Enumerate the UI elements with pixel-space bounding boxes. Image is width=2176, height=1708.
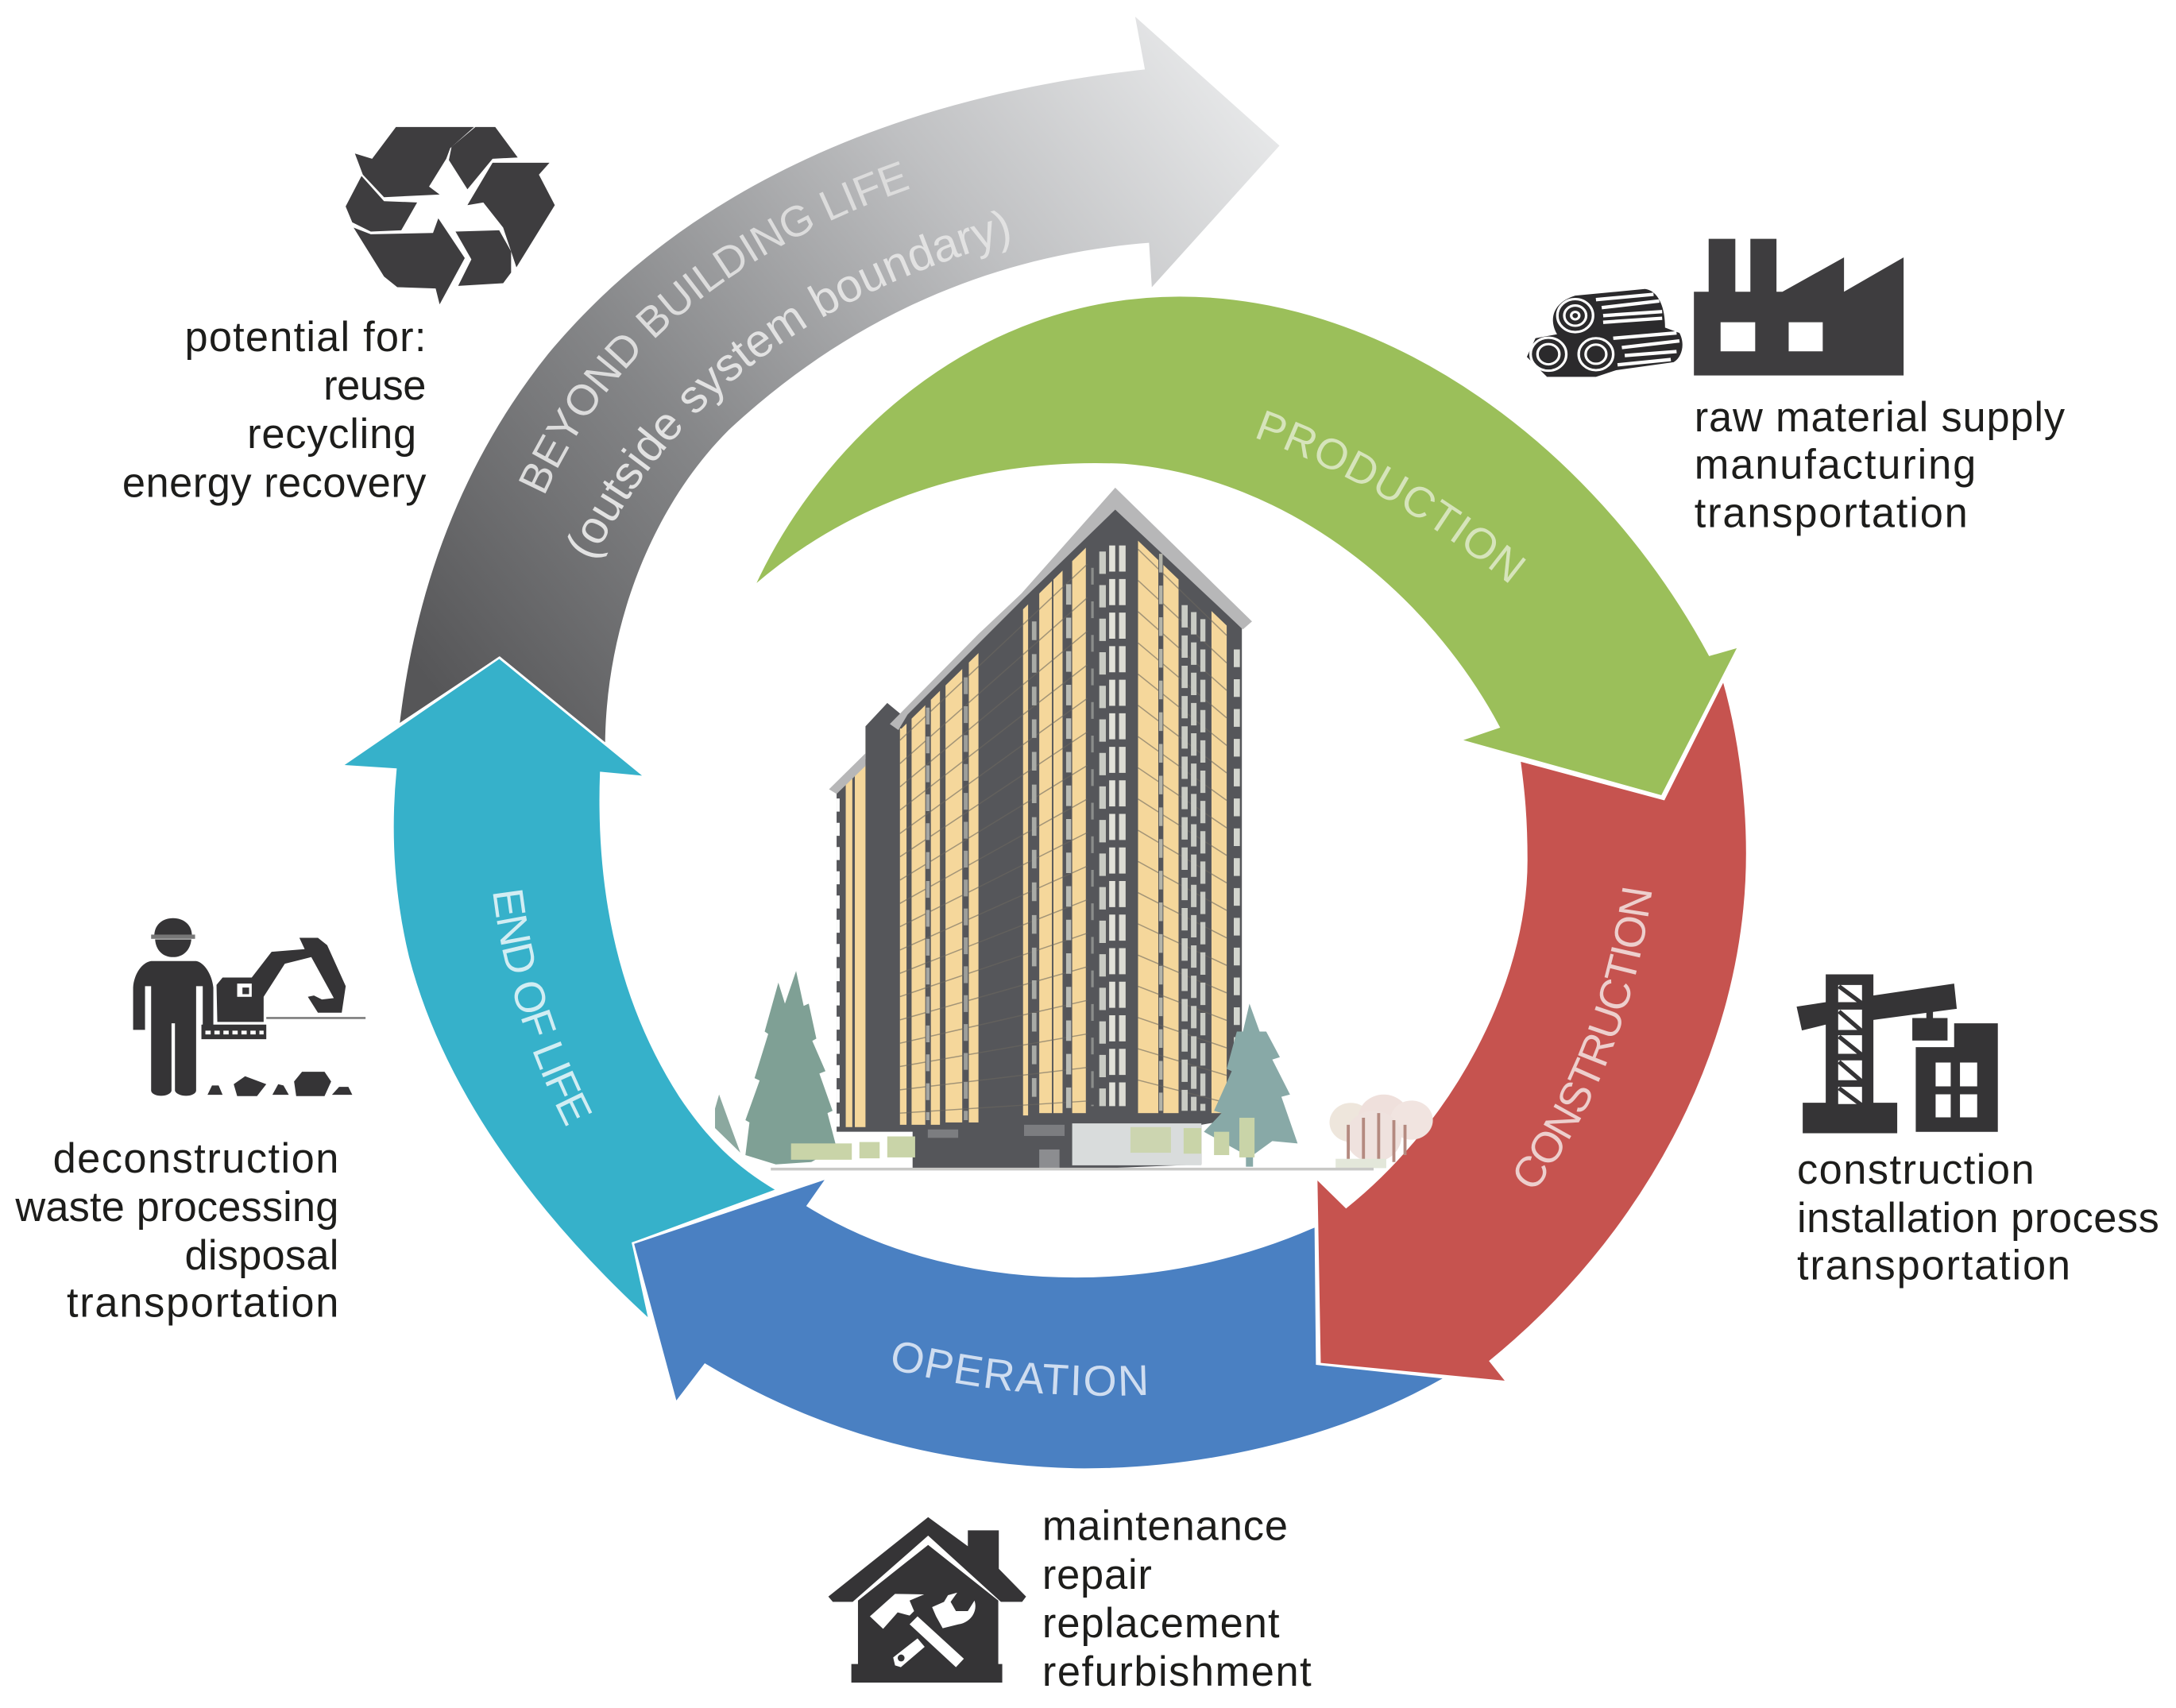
arrow: operation [632,1180,1443,1468]
text: end of life stage: transportation [67,1280,338,1326]
arrow: beyond building life [400,17,1279,742]
icon: factory [1694,239,1904,376]
text: potential for: recycling [247,412,416,458]
label: production: PRODUCTION [1257,410,1526,583]
text: construction stage [1797,1147,2159,1289]
text: construction stage: construction [1797,1147,2035,1193]
text: end of life stage: deconstruction [53,1136,338,1182]
text: operation stage: maintenance [1042,1504,1288,1550]
text: operation stage: replacement [1042,1601,1280,1647]
building illustration [715,488,1433,1170]
shrubs [791,1118,1254,1160]
text: construction stage: transportation [1797,1242,2070,1289]
floor lines [900,549,1227,1113]
building body [837,508,1242,1170]
text: end of life stage [14,1136,338,1326]
right tree [1204,1003,1297,1167]
label: outside system boundary: (outside system boundary) [567,211,1009,558]
text: production stage: manufacturing [1695,442,1976,489]
text: production stage: transportation [1695,491,1968,537]
arrow: production [756,296,1737,795]
windows [838,546,1237,1127]
text: end of life stage: disposal [184,1233,338,1279]
text: operation stage [1042,1504,1312,1695]
text: operation stage: refurbishment [1042,1649,1312,1695]
icon: worker and excavator [133,918,365,1096]
text: end of life stage: waste processing [14,1184,338,1231]
label: beyond building life: BEYOND BUILDING LIFE [519,161,910,493]
text: potential for: energy recovery [122,460,427,506]
pink trees [1330,1095,1433,1168]
text: potential for [122,315,427,506]
text: production stage: raw material supply [1695,395,2066,441]
text: potential for: reuse [323,363,426,409]
icon: house with tools [829,1517,1026,1683]
label: operation: OPERATION [893,1343,1146,1397]
ground line [771,1167,1374,1172]
icon: recycle [346,127,555,304]
text: potential for: potential for: [184,315,426,361]
glass ground floor [928,1123,1201,1168]
label: construction: CONSTRUCTION [1516,888,1652,1187]
roof edge [890,488,1252,730]
wood cladding [846,516,1227,1127]
label: end of life: END OF LIFE [493,890,593,1126]
arrow: end of life [345,656,775,1317]
text: operation stage: repair [1042,1552,1152,1598]
excavator [202,937,365,1039]
text: construction stage: installation process [1797,1196,2159,1242]
left tree [745,971,837,1165]
far left tree [715,1095,740,1153]
worker [133,918,214,1096]
icon: crane [1796,974,1998,1133]
icon: logs [1527,289,1683,377]
arrow: construction [1317,683,1746,1381]
rubble [207,1072,352,1096]
text: production stage [1695,395,2066,537]
